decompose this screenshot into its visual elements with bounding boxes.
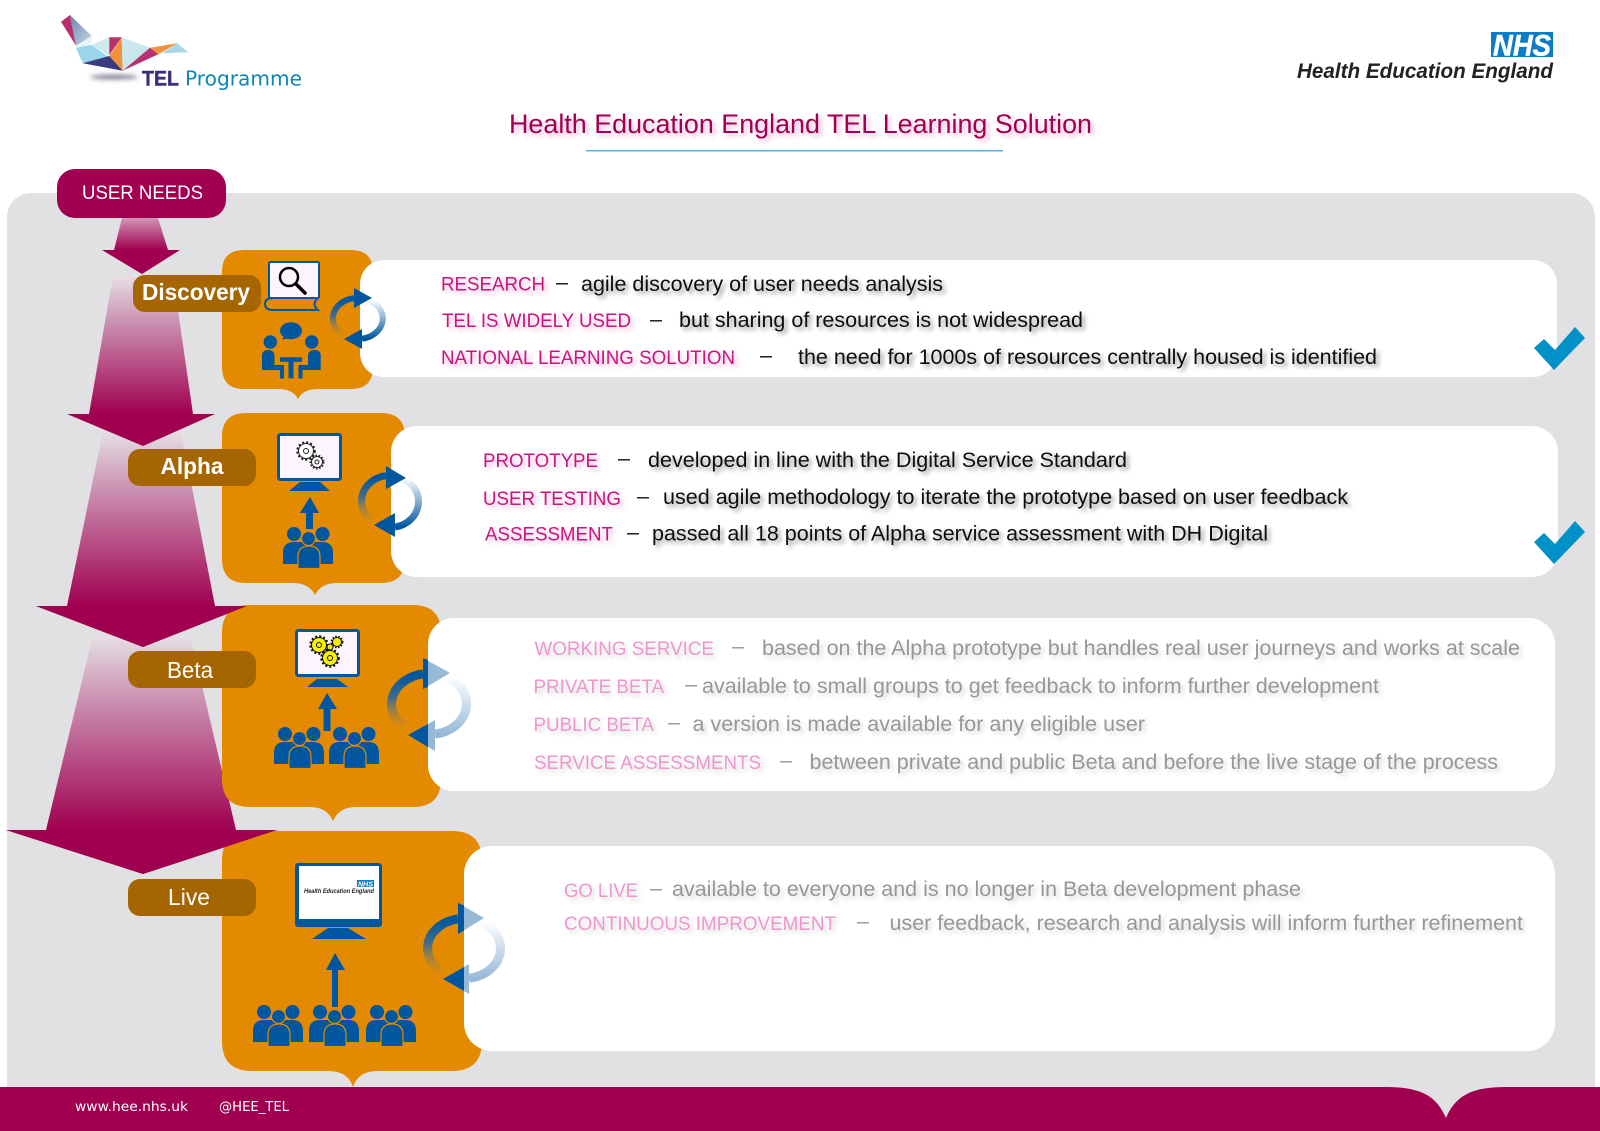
TEL Programme logo: Programme [185,66,302,90]
row: private beta: PRIVATE BETA [534,676,664,698]
text block: alpha [483,447,1349,546]
stage pill: Discovery: Discovery [142,279,250,305]
arrow heads overlapping cards [6,606,277,874]
panel: discovery card [222,250,373,399]
row: TEL is widely used: but sharing of resources is not widespread [679,309,1083,332]
row: go live: available to everyone and is no longer in Beta development phase [672,878,1301,901]
stage pill: Discovery [133,275,261,312]
row: private beta: – [685,673,697,696]
row: user testing: used agile methodology to iterate the prototype based on user feedback [663,486,1349,509]
row: national learning solution: NATIONAL LEARNING SOLUTION [441,347,735,369]
NHS Health Education England logo: Health Education England [1297,60,1554,83]
row: working service: based on the Alpha prototype but handles real user journeys and works at scale [762,637,1520,660]
row: continuous improvement: CONTINUOUS IMPROVEMENT [564,913,836,935]
row: prototype [483,447,1127,472]
icon: book with magnifying glass [265,262,319,310]
stage pill: Live [128,879,256,916]
row: TEL is widely used: TEL IS WIDELY USED [442,310,631,332]
row: prototype: PROTOTYPE [483,450,598,472]
stage pill: Live: Live [168,884,210,910]
NHS Health Education England logo: NHS [1493,30,1551,62]
icon: discovery cycle arrows [333,288,383,349]
row: user testing: USER TESTING [483,488,621,510]
footer band [0,1087,1600,1131]
panel: beta text box [428,618,1555,791]
NHS Health Education England logo [1297,30,1554,83]
row: working service: WORKING SERVICE [534,638,714,660]
footer website: www.hee.nhs.uk [75,1100,188,1115]
row: continuous improvement: – [857,910,869,933]
arrow: beta to live [6,635,277,874]
row: service assessments: between private and public Beta and before the live stage of the process [810,751,1498,774]
row: TEL is widely used [442,308,1083,332]
icon: alpha check mark [1534,521,1585,564]
row: prototype: developed in line with the Digital Service Standard [648,449,1127,472]
icon: live monitor with NHS logo: NHS [358,882,373,888]
panel: live text box [464,846,1555,1051]
row: service assessments: – [780,749,792,772]
row: public beta: – [668,711,680,734]
row: working service [534,635,1520,660]
arrow: alpha to beta [36,431,247,647]
panel: alpha card [222,413,405,595]
panel: discovery text box [360,260,1557,377]
icon: beta cycle arrows [392,658,467,751]
TEL Programme logo [61,15,302,90]
row: assessment: ASSESSMENT [485,524,613,546]
icon: alpha people [283,527,333,568]
icon: live cycle arrows [428,903,501,994]
text block: beta [534,635,1520,774]
icon: beta up arrow [318,693,337,731]
icon: alpha up arrow [300,497,319,529]
user needs label: USER NEEDS [82,182,203,204]
icon: alpha monitor with gears [278,434,340,491]
row: working service: – [732,635,744,658]
stage pill: Beta [128,651,256,688]
row: continuous improvement [564,910,1523,935]
stage pill: Beta: Beta [167,657,214,683]
icon: live up arrow [326,953,345,1007]
row: research: agile discovery of user needs analysis [581,273,943,296]
stage pill: Alpha [128,449,256,486]
row: service assessments [534,749,1498,774]
row: research: – [556,271,568,294]
panel: beta card [222,605,441,821]
icon: discovery check mark [1534,327,1585,370]
icon: beta monitor with gears [296,630,358,687]
text block: discovery [441,271,1377,369]
row: assessment: passed all 18 points of Alpha service assessment with DH Digital [652,522,1268,546]
title: Health Education England TEL Learning Solution [509,109,1092,139]
icon: alpha cycle arrows [362,466,419,537]
arrow: user needs to discovery [102,218,180,274]
row: user testing: – [637,485,649,508]
row: research [441,271,943,296]
row: national learning solution: the need for 1000s of resources centrally housed is identified [798,346,1377,369]
panel: alpha text box [391,426,1558,577]
row: national learning solution [441,344,1377,369]
icon: live monitor with NHS logo: Health Education England [304,889,374,895]
row: TEL is widely used: – [650,308,662,331]
icon: live monitor with NHS logo [295,863,382,939]
footer handle: @HEE_TEL [219,1100,290,1115]
row: service assessments: SERVICE ASSESSMENTS [534,752,761,774]
row: private beta: available to small groups to get feedback to inform further development [702,675,1379,698]
row: public beta: PUBLIC BETA [534,714,654,736]
row: assessment: – [627,521,639,544]
user needs label [57,169,226,218]
row: continuous improvement: user feedback, research and analysis will inform further refinement [890,912,1523,935]
row: public beta: a version is made available for any eligible user [692,713,1145,736]
row: national learning solution: – [760,344,772,367]
icon: beta people [274,727,379,768]
text block: live [564,877,1523,935]
icon: live people [253,1005,416,1046]
panel: live card [222,831,482,1087]
arrow: discovery to alpha [67,276,215,446]
stage pill: Alpha: Alpha [160,453,224,479]
TEL Programme logo: TEL [142,66,179,90]
row: research: RESEARCH [441,274,545,296]
row: public beta [534,711,1145,736]
row: prototype: – [618,447,630,470]
row: go live: GO LIVE [564,880,638,902]
row: go live: – [650,877,662,900]
icon: people meeting at table [262,322,321,378]
